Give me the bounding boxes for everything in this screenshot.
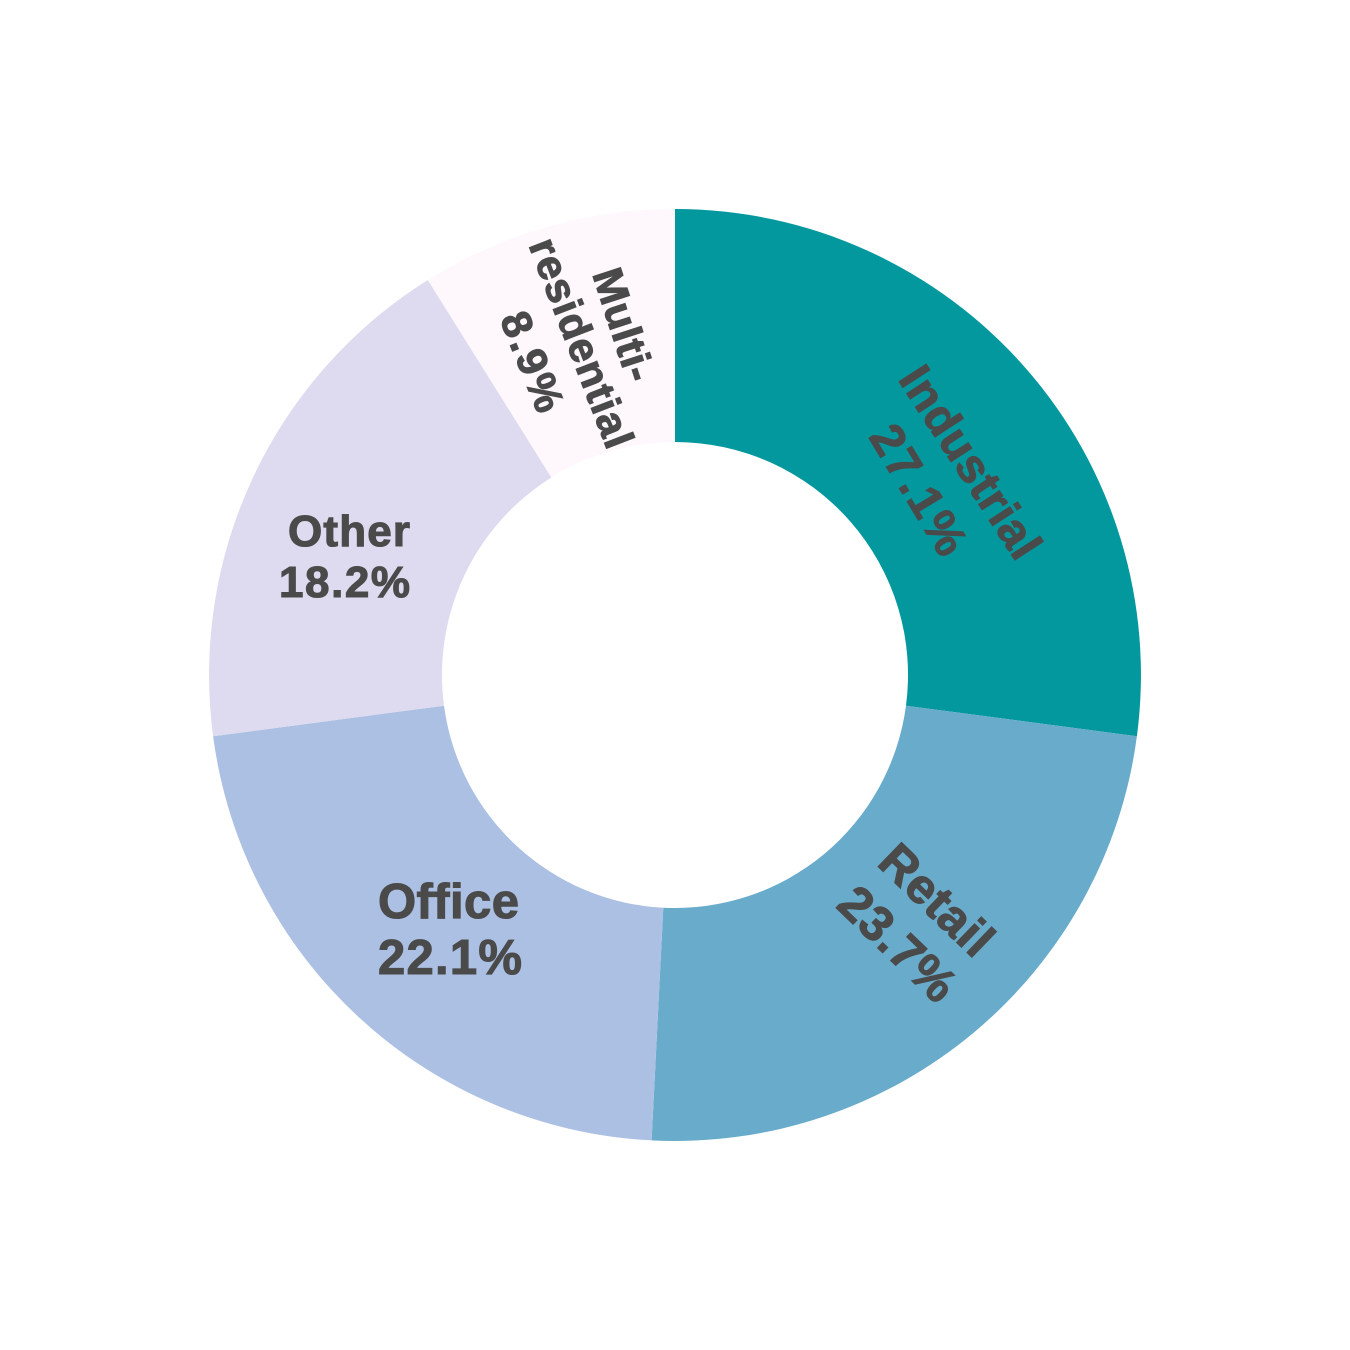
segment: Office 22.1%	[213, 706, 663, 1140]
segment: Retail 23.7%: 23.7%	[827, 876, 967, 1013]
segment: Multi-residential 8.9%: 8.9%	[491, 305, 574, 419]
segment: Other 18.2%: 18.2%	[279, 558, 410, 607]
segment: Industrial 27.1%: Industrial	[889, 356, 1053, 568]
segment: Office 22.1%: Office	[378, 875, 519, 929]
segment: Other 18.2%	[209, 280, 551, 736]
segment: Multi-residential 8.9%: residential	[520, 231, 643, 454]
segment: Multi-residential 8.9%	[428, 209, 675, 478]
segment: Industrial 27.1%	[675, 209, 1141, 736]
segment: Office 22.1%: 22.1%	[378, 931, 522, 985]
segment: Industrial 27.1%: 27.1%	[860, 415, 979, 564]
segment: Multi-residential 8.9%: Multi-	[584, 262, 664, 387]
segment: Other 18.2%: Other	[288, 507, 410, 556]
segment: Retail 23.7%	[652, 706, 1137, 1141]
segment: Retail 23.7%: Retail	[868, 833, 1004, 967]
